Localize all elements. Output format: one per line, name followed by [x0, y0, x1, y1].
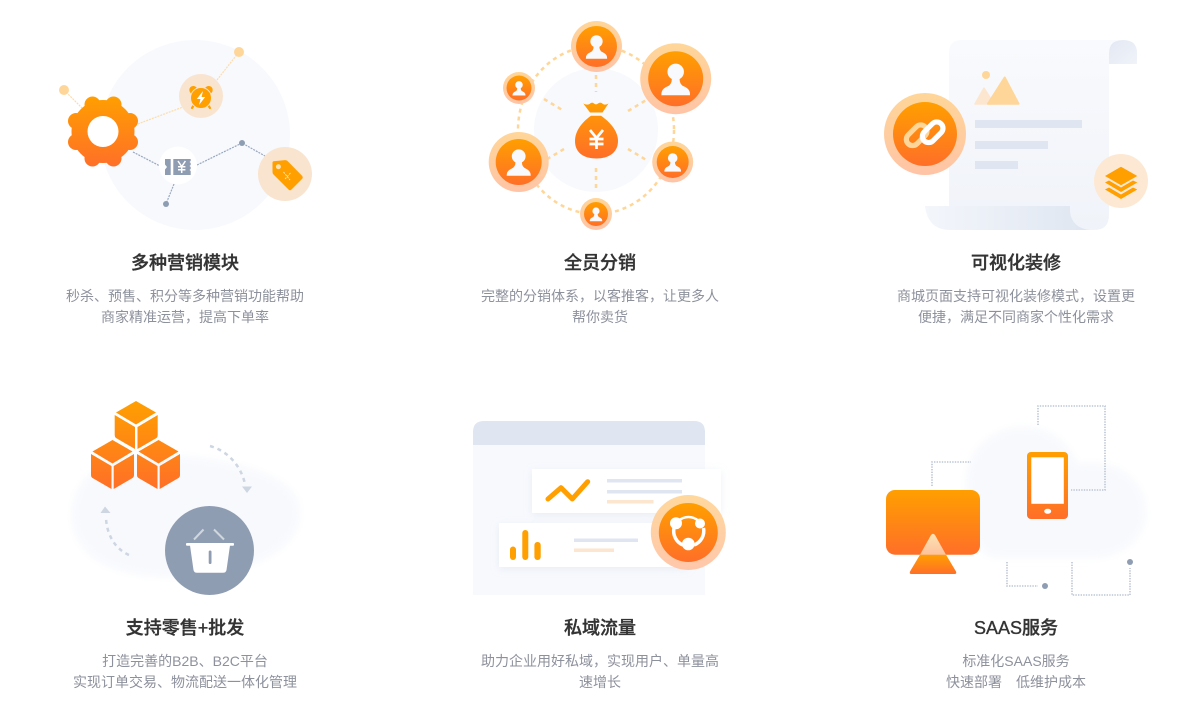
- background circle: [100, 40, 290, 230]
- text: visual decoration: 商城页面支持可视化装修模式，设置更: [897, 288, 1135, 304]
- card: trend: [532, 469, 721, 513]
- icon: coupon: [159, 146, 197, 184]
- text: private traffic: 速增长: [579, 674, 621, 690]
- connector lines: [64, 52, 265, 204]
- text: distribution: 帮你卖货: [572, 309, 628, 325]
- text: distribution: 完整的分销体系，以客推客，让更多人: [481, 288, 719, 304]
- panel: visual decoration: [884, 40, 1148, 230]
- text: private traffic: [481, 653, 719, 690]
- background blob: [72, 455, 300, 577]
- panel: private traffic: [473, 421, 726, 595]
- avatar: small left: [503, 72, 535, 104]
- icon: share badge: [651, 495, 726, 570]
- icon: phone: [1027, 452, 1068, 519]
- title: visual decoration: 可视化装修: [971, 253, 1061, 273]
- icon: layers: [1094, 154, 1148, 208]
- image placeholder: [975, 71, 1018, 104]
- avatar: top: [571, 21, 622, 72]
- document roll: [925, 40, 1137, 230]
- avatar: top right: [640, 43, 711, 114]
- icon: price tag: [258, 147, 312, 201]
- panel: SAAS services: [886, 406, 1146, 595]
- text: marketing modules: 秒杀、预售、积分等多种营销功能帮助: [66, 288, 304, 304]
- background circle: [534, 68, 658, 192]
- text: marketing modules: 商家精准运营，提高下单率: [101, 309, 269, 325]
- avatar: large left: [489, 132, 549, 192]
- node dots: [59, 47, 245, 207]
- arrow: top right: [210, 446, 252, 493]
- text lines: [975, 120, 1082, 169]
- icon: gear: [68, 96, 138, 166]
- avatar: bottom: [580, 198, 612, 230]
- title: retail and wholesale: 支持零售+批发: [126, 618, 244, 638]
- avatar: right: [652, 142, 693, 182]
- panel: retail and wholesale: [72, 401, 300, 595]
- browser window: [473, 421, 705, 595]
- text: SAAS services: [946, 653, 1086, 690]
- text: retail and wholesale: 实现订单交易、物流配送一体化管理: [73, 674, 297, 690]
- text: distribution: [481, 288, 719, 325]
- text: private traffic: 助力企业用好私域，实现用户、单量高: [481, 653, 719, 669]
- icon: chain link: [884, 93, 966, 175]
- text: visual decoration: [897, 288, 1135, 325]
- panel: marketing modules: [59, 40, 312, 230]
- title: distribution: 全员分销: [564, 252, 636, 273]
- text: retail and wholesale: [73, 653, 297, 690]
- icon: cubes: [91, 401, 180, 489]
- text: visual decoration: 便捷，满足不同商家个性化需求: [918, 309, 1114, 325]
- icon: basket: [165, 506, 254, 595]
- dotted connectors: [932, 406, 1130, 595]
- text: SAAS services: 标准化SAAS服务: [962, 653, 1070, 669]
- panel: distribution: [489, 21, 711, 230]
- text: marketing modules: [66, 288, 304, 325]
- card: bars: [499, 523, 688, 567]
- icon: monitor: [886, 490, 980, 574]
- background cloud: [966, 427, 1146, 558]
- text: SAAS services: 快速部署 低维护成本: [946, 674, 1086, 690]
- title: private traffic: 私域流量: [564, 618, 636, 638]
- text: retail and wholesale: 打造完善的B2B、B2C平台: [102, 653, 268, 669]
- arrow: bottom left: [100, 506, 129, 555]
- title: SAAS services: SAAS服务: [974, 618, 1058, 638]
- title: marketing modules: 多种营销模块: [131, 253, 239, 273]
- icon: alarm clock: [179, 74, 223, 118]
- connector dots: [1042, 559, 1133, 589]
- dashed ring and spokes: [518, 46, 674, 214]
- icon: money bag: [575, 103, 618, 158]
